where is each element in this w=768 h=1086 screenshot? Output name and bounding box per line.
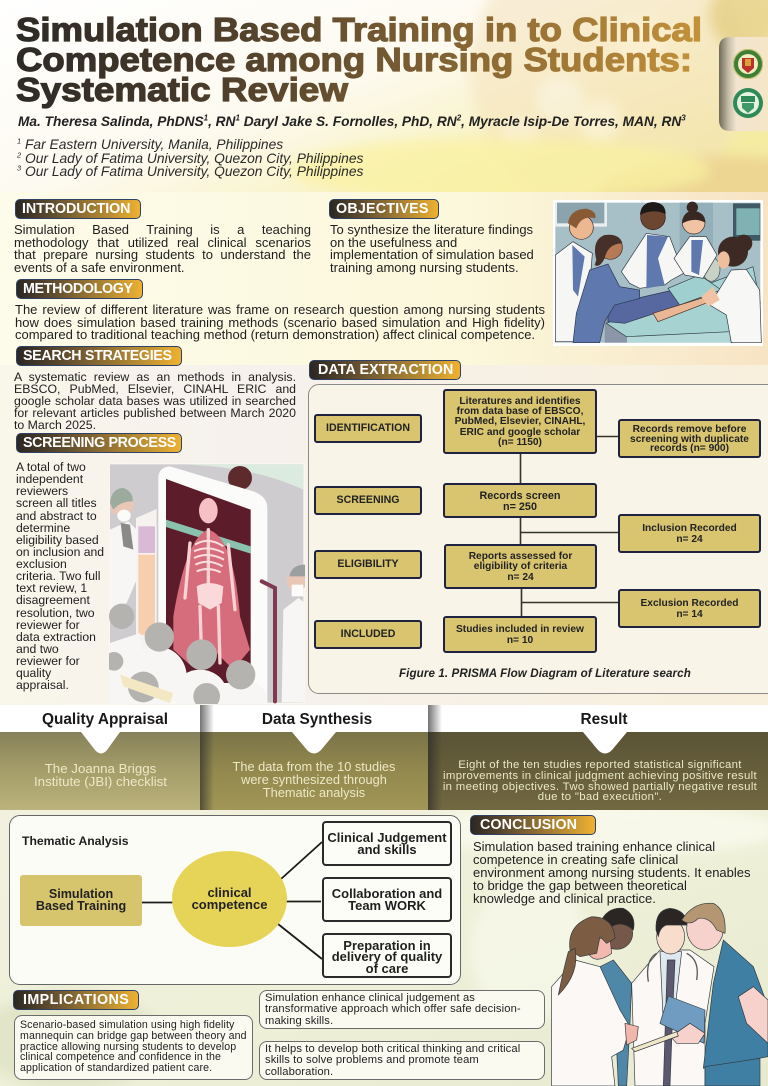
affiliations: 2 Our Lady of Fatima University, Quezon City, Philippines	[17, 150, 363, 166]
methodology text: how does simulation based training methods (scenario based simulation and High fidelity)	[15, 315, 545, 330]
conclusion text: competence in creating safe clinical	[473, 852, 678, 867]
pointer notches	[81, 732, 627, 754]
box: studies included: n= 10	[507, 634, 533, 646]
theme: clinical judgement	[322, 821, 452, 866]
theme: preparation: delivery of quality	[332, 949, 442, 964]
box: simulation based training	[20, 875, 142, 926]
thematic heading: Thematic Analysis	[22, 834, 129, 848]
box: records screened	[443, 483, 597, 518]
affiliations	[17, 136, 364, 179]
search strategies text	[14, 370, 296, 432]
screening process text: text review, 1	[16, 581, 87, 595]
box: inclusion recorded: Inclusion Recorded	[642, 523, 737, 534]
panel frame	[308, 384, 768, 694]
conclusion text: knowledge and clinical practice.	[473, 891, 656, 906]
screening process text: data extraction	[16, 630, 96, 644]
panel: PRISMA flow diagram	[308, 384, 768, 694]
box: simulation based training: Based Training	[36, 898, 126, 912]
box: records screened: Records screen	[479, 490, 561, 502]
screening process text: appraisal.	[16, 678, 69, 692]
heading: objectives: OBJECTIVES	[336, 201, 429, 217]
conclusion text: to bridge the gap between theoretical	[473, 878, 687, 893]
implication note: clinical judgement	[259, 990, 545, 1029]
stage: eligibility: ELIGIBILITY	[337, 558, 399, 570]
screening process text	[16, 460, 104, 692]
screening process text: exclusion	[16, 557, 67, 571]
conclusion text: Simulation based training enhance clinical	[473, 839, 715, 854]
heading: data extraction: DATA EXTRACTION	[318, 362, 453, 378]
figure caption: Figure 1. PRISMA Flow Diagram of Literature search	[399, 667, 691, 680]
box: records removed: Records remove before	[633, 424, 746, 435]
box: inclusion recorded: n= 24	[676, 534, 703, 544]
box: studies included	[443, 616, 597, 653]
column fill: result	[428, 732, 768, 810]
illustration: clinicians reviewing a chart	[551, 902, 768, 1086]
column fill: data synthesis	[200, 732, 428, 810]
search strategies text: EBSCO, PubMed, Elsevier, CINAHL ERIC and	[14, 382, 296, 396]
heading: conclusion: CONCLUSION	[480, 817, 577, 833]
result text: Eight of the ten studies reported statistical significant	[458, 759, 742, 771]
result text: due to "bad execution".	[538, 791, 662, 803]
authors: Ma. Theresa Salinda, PhDNS1, RN1 Daryl Jake S. Fornolles, PhD, RN2, Myracle Isip-De Torres, MAN, RN3	[18, 113, 686, 129]
screening process text: independent	[16, 472, 83, 486]
screening process text: determine	[16, 521, 70, 535]
stage: included: INCLUDED	[341, 628, 395, 640]
implications text box: Scenario-based simulation using high fidelity	[20, 1019, 234, 1031]
icon: university seal one	[733, 49, 763, 79]
icon: university seal two	[733, 88, 763, 118]
column shadow: result edge	[428, 705, 442, 810]
theme: collaboration: Collaboration and	[332, 886, 442, 901]
box: exclusion recorded: Exclusion Recorded	[641, 598, 738, 609]
introduction text: Simulation Based Training is a teaching	[14, 222, 311, 237]
flow connectors	[520, 436, 618, 616]
heading: methodology	[16, 279, 143, 299]
ellipse: clinical competence: clinical	[207, 885, 252, 900]
quality appraisal text: The Joanna Briggs	[45, 761, 156, 776]
theme: preparation: of care	[366, 961, 408, 976]
implication note: critical thinking: skills to solve problems and promote team	[265, 1054, 479, 1066]
implication note: clinical judgement: making skills.	[265, 1015, 333, 1027]
conclusion text: environment among nursing students. It enables	[473, 865, 751, 880]
box: literature identified	[443, 389, 597, 454]
result text: improvements in clinical judgment achieving positive result	[443, 770, 757, 782]
column shadow: data synthesis edge	[200, 705, 214, 810]
box: literature identified: PubMed, Elsevier, CINAHL,	[455, 416, 585, 427]
box: literature identified: ERIC and google scholar	[460, 427, 580, 438]
implications text box: mannequin can bridge gap between theory and	[20, 1030, 247, 1042]
implications text box: clinical competence and confidence in the	[20, 1051, 221, 1063]
stage: identification	[314, 414, 422, 443]
methodology text	[15, 302, 545, 342]
illustration: reviewers viewing anatomical x-ray display	[109, 464, 305, 704]
affiliations: 1 Far Eastern University, Manila, Philippines	[17, 136, 283, 152]
screening process text: reviewers	[16, 484, 68, 498]
theme: clinical judgement: and skills	[357, 842, 417, 856]
screening process text: criteria. Two full	[16, 569, 100, 583]
result text: in meeting objectives. Two showed partially negative result	[443, 781, 757, 793]
thematic connector lines	[142, 841, 322, 960]
ellipse: clinical competence	[172, 851, 287, 947]
conclusion text	[473, 839, 751, 906]
stage: screening: SCREENING	[336, 494, 399, 506]
theme: collaboration	[322, 877, 452, 922]
screening process text: disagreement	[16, 593, 90, 607]
screening process text: quality	[16, 666, 51, 680]
box: records screened: n= 250	[503, 500, 537, 512]
heading: methodology: METHODOLOGY	[23, 281, 133, 297]
data synthesis text: The data from the 10 studies	[233, 759, 395, 774]
implications text box	[14, 1015, 253, 1080]
implication note: clinical judgement: transformative approach which offer safe decision-	[265, 1003, 521, 1015]
heading: data synthesis: Data Synthesis	[262, 711, 372, 728]
box: literature identified: from data base of EBSCO,	[457, 406, 583, 417]
objectives text: To synthesize the literature findings	[330, 222, 533, 237]
screening process text: resolution, two	[16, 606, 95, 620]
panel: thematic analysis	[9, 815, 461, 985]
title: Systematic Review	[16, 71, 348, 108]
screening process text: on inclusion and	[16, 545, 104, 559]
illustration: students at simulated patient bedside	[553, 200, 763, 346]
heading: result: Result	[580, 711, 628, 728]
search strategies text: for relevant articles published between March 2020	[14, 406, 296, 420]
box: records removed: screening with duplicate	[630, 434, 749, 445]
box: reports assessed: Reports assessed for	[469, 551, 572, 562]
stage: screening	[314, 486, 422, 515]
panel: summary columns	[0, 705, 768, 810]
search strategies text: A systematic review as an methods in analysis.	[14, 370, 296, 384]
quality appraisal text: Institute (JBI) checklist	[34, 774, 167, 789]
implications text box: application of standardized patient care.	[20, 1062, 212, 1074]
box: exclusion recorded	[618, 589, 761, 628]
stage: identification: IDENTIFICATION	[326, 422, 410, 434]
column fill: quality appraisal	[0, 732, 200, 810]
objectives text: on the usefulness and	[330, 235, 457, 250]
heading: quality appraisal: Quality Appraisal	[42, 711, 168, 728]
introduction text: that prepare nursing students to understand the	[14, 247, 311, 262]
introduction text	[14, 222, 311, 275]
stage: included	[314, 620, 422, 649]
affiliations: 3 Our Lady of Fatima University, Quezon City, Philippines	[17, 164, 363, 179]
implication note: clinical judgement: Simulation enhance clinical judgement as	[265, 992, 475, 1004]
box: records removed	[618, 419, 761, 458]
result text	[443, 759, 757, 803]
implications text box: practice allowing nursing students to develop	[20, 1041, 236, 1053]
title	[16, 11, 702, 109]
heading: conclusion	[470, 815, 596, 835]
objectives text: training among nursing students.	[330, 260, 519, 275]
implication note: critical thinking	[259, 1041, 545, 1080]
data synthesis text	[232, 759, 395, 800]
heading: implications: IMPLICATIONS	[23, 992, 129, 1008]
screening process text: and abstract to	[16, 508, 97, 522]
screening process text: reviewer for	[16, 654, 80, 668]
data synthesis text: Thematic analysis	[263, 785, 365, 800]
methodology text: compared to traditional teaching method (return demonstration) affect clinical competence.	[15, 327, 535, 342]
introduction text: methodology that utilized real clinical scenarios	[14, 235, 311, 250]
theme: clinical judgement: Clinical Judgement	[327, 830, 447, 845]
quality appraisal text	[34, 761, 167, 789]
stage: eligibility	[314, 550, 422, 579]
box: reports assessed: eligibility of criteria	[474, 561, 567, 572]
screening process text: screen all titles	[16, 496, 97, 510]
screening process text: eligibility based	[16, 533, 99, 547]
search strategies text: to March 2025.	[14, 418, 96, 432]
search strategies text: google scholar data bases was utilized in searched	[14, 394, 296, 408]
box: reports assessed: n= 24	[507, 572, 534, 583]
implication note: critical thinking: collaboration.	[265, 1066, 333, 1078]
ellipse: clinical competence: competence	[192, 896, 267, 912]
heading: introduction	[15, 199, 141, 219]
title: Simulation Based Training in to Clinical	[16, 11, 702, 48]
data synthesis text: were synthesized through	[241, 772, 387, 787]
box: literature identified: (n= 1150)	[498, 437, 542, 448]
heading: introduction: INTRODUCTION	[22, 201, 130, 217]
introduction text: events of a safe environment.	[14, 260, 185, 275]
screening process text: reviewer for	[16, 618, 80, 632]
box: simulation based training: Simulation	[49, 887, 113, 901]
implication note: critical thinking: It helps to develop both critical thinking and critical	[265, 1043, 520, 1055]
box: literature identified: Literatures and identifies	[459, 396, 581, 407]
title: Competence among Nursing Students:	[16, 41, 692, 78]
heading: objectives	[329, 199, 439, 219]
box: reports assessed	[444, 544, 597, 589]
heading: implications	[13, 990, 139, 1010]
theme: collaboration: Team WORK	[348, 898, 426, 912]
theme: preparation	[322, 933, 452, 978]
screening process text: A total of two	[16, 460, 86, 474]
objectives text: implementation of simulation based	[330, 247, 534, 262]
box: studies included: Studies included in review	[456, 624, 584, 635]
theme: preparation: Preparation in	[343, 938, 431, 953]
methodology text: The review of different literature was frame on research question among nursing students	[15, 302, 545, 317]
heading: search strategies: SEARCH STRATEGIES	[23, 348, 172, 364]
screening process text: and two	[16, 642, 59, 656]
box: exclusion recorded: n= 14	[676, 608, 703, 620]
box: inclusion recorded	[618, 514, 761, 553]
objectives text	[330, 222, 534, 275]
box: records removed: records (n= 900)	[650, 443, 729, 454]
logo panel	[719, 37, 768, 131]
heading: screening process: SCREENING PROCESS	[23, 435, 176, 451]
